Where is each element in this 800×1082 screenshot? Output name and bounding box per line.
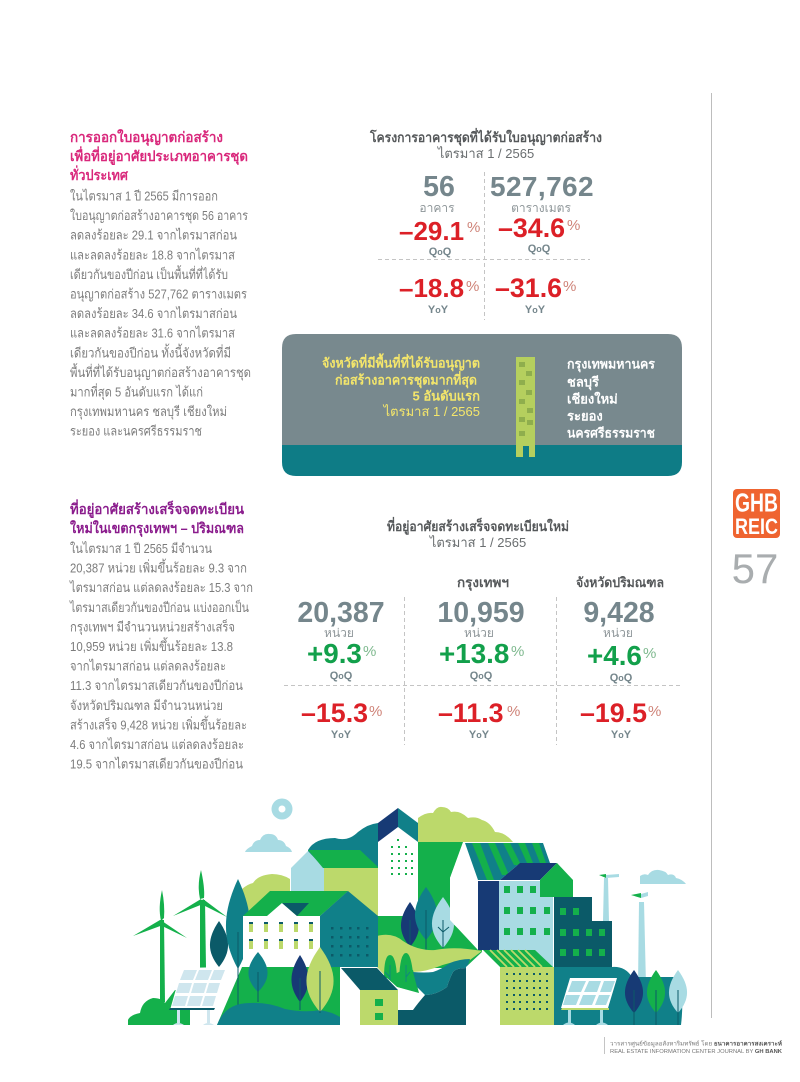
text block: newly registered housing: 19.5 จากไตรมาสเดียวกันของปีก่อน [70,757,243,772]
text block: building permits: พื้นที่ที่ได้รับอนุญาตก่อสร้างอาคารชุด [70,363,251,381]
text block: building permits: มากที่สุด 5 อันดับแรก ได้แก่ [70,384,203,400]
text block: building permits: และลดลงร้อยละ 18.8 จากไตรมาส [70,247,235,262]
text block: newly registered housing: สร้างเสร็จ 9,428 หน่วย เพิ่มขึ้นร้อยละ [70,715,247,732]
bush: left [128,990,190,1025]
text block: building permits: ระยอง และนครศรีธรรมราช [70,424,202,439]
heading: newly registered housing: ใหม่ในเขตกรุงเทพฯ – ปริมณฑล [70,519,244,537]
stats: housing: % [643,645,656,662]
illustration: green city [128,798,687,1025]
icon: right cloud [640,870,686,884]
stats: permits: % [567,217,580,234]
text block: building permits [70,188,251,439]
dark teal building [554,897,612,967]
stats: housing: กรุงเทพฯ [457,575,509,591]
text block: newly registered housing: จังหวัดปริมณฑล มีจำนวนหน่วย [70,698,223,713]
stats: permits: % [466,278,479,295]
stats: housing: YoY [469,729,490,741]
icon: tower building [516,357,535,457]
stats: permits: –18.8 [399,273,464,303]
text block: building permits: ลดลงร้อยละ 29.1 จากไตรมาสก่อน [70,228,237,243]
text block: newly registered housing: 10,959 หน่วย เพิ่มขึ้นร้อยละ 13.8 [70,637,233,654]
text block: building permits: อนุญาตก่อสร้าง 527,762 ตารางเมตร [70,286,247,302]
stats: permits: QoQ [429,246,452,258]
stats: permits: ตารางเมตร [511,201,571,215]
footer credit [604,1037,783,1055]
logo: GHB REIC: REIC [735,514,778,539]
stats: housing: –11.3 [438,698,504,728]
stats: housing: YoY [331,729,352,741]
wind turbines: left [133,870,227,1002]
icon: sun [272,798,292,820]
text block: building permits: เดียวกันของปีก่อน เป็นพื้นที่ที่ได้รับ [70,265,228,282]
chart title: condo projects permitted: ไตรมาส 1 / 2565 [437,146,534,161]
chart title: condo projects permitted [369,127,602,161]
text block: newly registered housing: 11.3 จากไตรมาสเดียวกันของปีก่อน [70,678,243,693]
text block: building permits: ใบอนุญาตก่อสร้างอาคารชุด 56 อาคาร [70,208,248,224]
background hills and houses [242,807,513,968]
stats: housing: –19.5 [580,698,647,728]
panel: top five provinces [282,334,682,476]
heading: building permits: เพื่อที่อยู่อาศัยประเภทอาคารชุด [70,146,248,165]
stats: permits: % [467,219,480,236]
panel heading: ไตรมาส 1 / 2565 [383,404,480,419]
heading: newly registered housing [70,499,244,537]
stats: housing: % [369,703,382,720]
stats: housing: +13.8 [439,638,509,669]
text block: newly registered housing: จากไตรมาสก่อน แต่ลดลงร้อยละ [70,659,226,674]
list of provinces: กรุงเทพมหานคร [567,356,655,372]
footer credit: วารสารศูนย์ข้อมูลอสังหาริมทรัพย์ โดย ธนาคารอาคารสงเคราะห์ [610,1040,782,1048]
stats: permits: 56 [423,171,455,203]
lower houses: centre right [466,950,554,1025]
stats: housing: +4.6 [587,640,642,671]
stats: permits: YoY [525,304,546,316]
text block: newly registered housing [69,541,253,772]
logo: GHB REIC [733,488,780,539]
stats: housing: หน่วย [324,626,354,640]
right turbines [599,874,648,985]
right teal ground with solar panel [554,967,682,1025]
stats: housing: หน่วย [464,626,494,640]
stats: permits: YoY [428,304,449,316]
stats: housing: หน่วย [603,626,633,640]
stats: housing: จังหวัดปริมณฑล [576,575,664,590]
text block: newly registered housing: 20,387 หน่วย เพิ่มขึ้นร้อยละ 9.3 จาก [70,559,247,576]
list of provinces: ชลบุรี [567,374,599,390]
stats: housing: 20,387 [297,597,385,629]
stats: housing: –15.3 [301,698,368,728]
text block: building permits: เดียวกันของปีก่อน ทั้งนี้จังหวัดที่มี [70,343,231,360]
stats: permits: –29.1 [399,216,464,246]
list of provinces: ระยอง [567,408,603,424]
heading: building permits: ทั่วประเทศ [70,165,129,183]
text block: building permits: กรุงเทพมหานคร ชลบุรี เชียงใหม่ [70,404,227,420]
panel heading: ก่อสร้างอาคารชุดมากที่สุด [335,370,477,388]
chart title: condo projects permitted: โครงการอาคารชุดที่ได้รับใบอนุญาตก่อสร้าง [369,127,602,146]
stats: permits [378,171,594,320]
trees: right [625,970,687,1025]
stats: permits: QoQ [528,243,551,255]
panel heading: จังหวัดที่มีพื้นที่ที่ได้รับอนุญาต [322,352,480,372]
footer credit: REAL ESTATE INFORMATION CENTER JOURNAL BY GH BANK [610,1049,783,1055]
heading: newly registered housing: ที่อยู่อาศัยสร้างเสร็จจดทะเบียน [70,499,244,518]
small house [340,967,398,1025]
stats: permits: % [563,278,576,295]
text block: newly registered housing: 4.6 จากไตรมาสก่อน แต่ลดลงร้อยละ [70,737,244,752]
striped roof building [450,843,573,967]
icon: left cloud [245,834,292,852]
chart title: newly registered housing: ที่อยู่อาศัยสร้างเสร็จจดทะเบียนใหม่ [387,516,569,535]
list of provinces: เชียงใหม่ [567,390,618,406]
page number: 57 [732,545,778,592]
text block: newly registered housing: กรุงเทพฯ มีจำนวนหน่วยสร้างเสร็จ [70,617,235,635]
panel heading [322,352,480,419]
stats: permits: อาคาร [419,201,455,215]
stats: permits: 527,762 [490,171,594,202]
text block: newly registered housing: ไตรมาสเดียวกันของปีก่อน แบ่งออกเป็น [69,598,249,615]
stats: permits: –34.6 [498,213,565,243]
stats: housing: QoQ [330,670,353,682]
front hill and trees: left [217,947,340,1025]
main house block [210,879,378,1025]
stats: housing: +9.3 [307,638,362,669]
chart title: newly registered housing: ไตรมาส 1 / 2565 [429,535,526,550]
stats: housing: 9,428 [583,597,655,629]
panel heading: 5 อันดับแรก [413,388,480,404]
text block: newly registered housing: ไตรมาสก่อน แต่ลดลงร้อยละ 15.3 จาก [69,580,253,595]
text block: building permits: ลดลงร้อยละ 34.6 จากไตรมาสก่อน [70,306,237,321]
text block: building permits: และลดลงร้อยละ 31.6 จากไตรมาส [70,326,235,341]
stats: housing: 10,959 [437,597,525,629]
list of provinces: นครศรีธรรมราช [567,426,655,440]
list of provinces [567,356,655,440]
stats: housing: % [507,703,520,720]
chart title: newly registered housing [387,516,569,550]
heading: building permits: การออกใบอนุญาตก่อสร้าง [70,128,223,146]
stats: housing: % [363,643,376,660]
stats: housing: YoY [611,729,632,741]
stats: housing [284,575,682,745]
stats: permits: –31.6 [495,273,562,303]
stats: housing: QoQ [610,672,633,684]
logo: GHB REIC: GHB [735,488,778,518]
tree group: centre [401,887,454,950]
solar panel: left [169,967,227,1025]
rolling hills: centre [377,935,482,1025]
text block: building permits: ในไตรมาส 1 ปี 2565 มีการออก [70,188,218,204]
stats: housing: % [511,643,524,660]
stats: housing: % [648,703,661,720]
heading: building permits [70,128,248,183]
text block: newly registered housing: ในไตรมาส 1 ปี 2565 มีจำนวน [70,541,212,556]
stats: housing: QoQ [470,670,493,682]
